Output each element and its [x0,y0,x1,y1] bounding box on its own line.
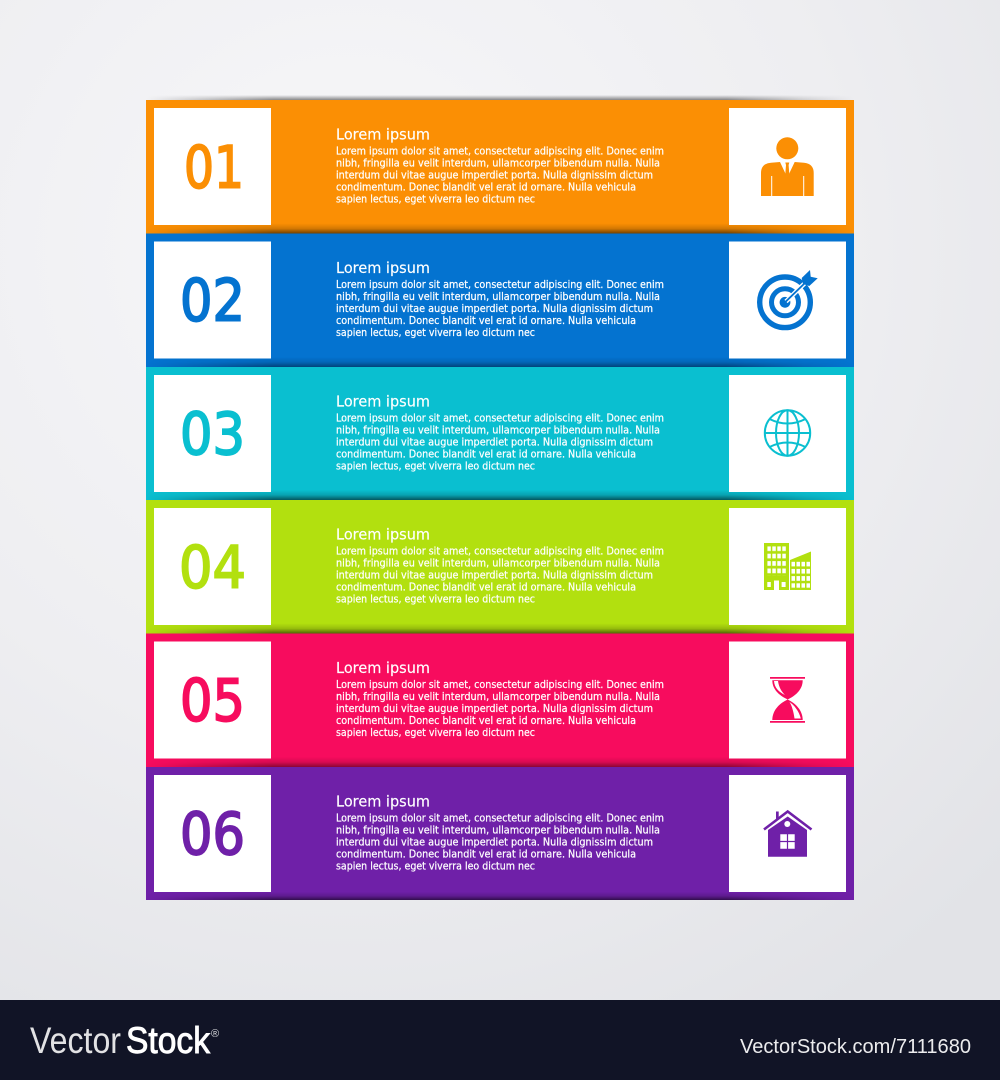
number box 01: 01 [184,134,244,202]
panel: row 05 [146,634,854,767]
text block 03: condimentum. Donec blandit vel erat id ornare. Nulla vehicula [336,448,636,460]
text block 04: interdum dui vitae augue imperdiet porta. Nulla dignissim dictum [336,569,653,581]
logo: Vector [30,1020,121,1061]
text block 02 [336,279,664,339]
text block 05 [336,679,664,739]
text block 06: nibh, fringilla eu velit interdum, ullamcorper bibendum nulla. Nulla [336,824,660,836]
icon box: target [729,242,846,358]
text block 04 [336,545,664,605]
text block 05: sapien lectus, eget viverra leo dictum nec [336,727,535,739]
number box 03: 03 [180,400,245,468]
number box 05 [154,642,271,758]
heading 03: Lorem ipsum [336,394,430,410]
heading 02: Lorem ipsum [336,260,430,277]
text block 03 [336,412,664,472]
heading 01: Lorem ipsum [336,126,430,144]
text block 05: nibh, fringilla eu velit interdum, ullamcorper bibendum nulla. Nulla [336,691,660,703]
number box 04 [154,508,271,625]
text block 02: sapien lectus, eget viverra leo dictum nec [336,327,535,339]
number box 02: 02 [180,266,245,334]
text block 06: interdum dui vitae augue imperdiet porta. Nulla dignissim dictum [336,836,653,848]
text block 06: sapien lectus, eget viverra leo dictum nec [336,860,535,872]
text block 02: interdum dui vitae augue imperdiet porta. Nulla dignissim dictum [336,303,653,315]
panel: row 04 [146,500,854,634]
panel: row 06 [146,767,854,900]
icon box: buildings [729,508,846,625]
logo [30,1020,219,1061]
icon box: businessman [729,108,846,225]
text block 03: interdum dui vitae augue imperdiet porta. Nulla dignissim dictum [336,436,653,448]
text block 06: condimentum. Donec blandit vel erat id ornare. Nulla vehicula [336,848,636,860]
text block 06: Lorem ipsum dolor sit amet, consectetur adipiscing elit. Donec enim [336,812,664,824]
image id: VectorStock.com/7111680 [740,1035,971,1058]
icon box: house [729,775,846,892]
text block 02: condimentum. Donec blandit vel erat id ornare. Nulla vehicula [336,315,636,327]
panel: row 02 [146,234,854,367]
number box 02 [154,242,271,358]
text block 01: interdum dui vitae augue imperdiet porta. Nulla dignissim dictum [336,169,653,181]
heading 05: Lorem ipsum [336,660,430,677]
number box 01 [154,108,271,225]
heading 06: Lorem ipsum [336,794,430,810]
text block 03: Lorem ipsum dolor sit amet, consectetur adipiscing elit. Donec enim [336,412,664,424]
text block 01: condimentum. Donec blandit vel erat id ornare. Nulla vehicula [336,181,636,193]
heading 04: Lorem ipsum [336,526,430,544]
number box 03 [154,375,271,492]
text block 02: Lorem ipsum dolor sit amet, consectetur adipiscing elit. Donec enim [336,279,664,291]
panel: row 01 [146,100,854,234]
text block 05: condimentum. Donec blandit vel erat id ornare. Nulla vehicula [336,715,636,727]
text block 02: nibh, fringilla eu velit interdum, ullamcorper bibendum nulla. Nulla [336,291,660,303]
text block 04: nibh, fringilla eu velit interdum, ullamcorper bibendum nulla. Nulla [336,557,660,569]
number box 04: 04 [179,534,246,602]
text block 04: condimentum. Donec blandit vel erat id ornare. Nulla vehicula [336,581,636,593]
number box 06: 06 [180,800,245,868]
text block 05: interdum dui vitae augue imperdiet porta. Nulla dignissim dictum [336,703,653,715]
text block 01: Lorem ipsum dolor sit amet, consectetur adipiscing elit. Donec enim [336,145,664,157]
text block 04: Lorem ipsum dolor sit amet, consectetur adipiscing elit. Donec enim [336,545,664,557]
icon box: globe [729,375,846,492]
text block 06 [336,812,664,872]
text block 01 [336,145,664,205]
logo: ® [211,1028,219,1040]
top edge shadow [156,96,842,100]
text block 03: nibh, fringilla eu velit interdum, ullamcorper bibendum nulla. Nulla [336,424,660,436]
text block 04: sapien lectus, eget viverra leo dictum nec [336,593,535,605]
number box 06 [154,775,271,892]
number box 05: 05 [180,666,245,734]
text block 01: nibh, fringilla eu velit interdum, ullamcorper bibendum nulla. Nulla [336,157,660,169]
text block 05: Lorem ipsum dolor sit amet, consectetur adipiscing elit. Donec enim [336,679,664,691]
logo: Stock [126,1020,210,1061]
icon box: hourglass [729,642,846,758]
text block 01: sapien lectus, eget viverra leo dictum nec [336,193,535,205]
text block 03: sapien lectus, eget viverra leo dictum nec [336,460,535,472]
footer bar [0,1000,1000,1080]
panel: row 03 [146,367,854,500]
